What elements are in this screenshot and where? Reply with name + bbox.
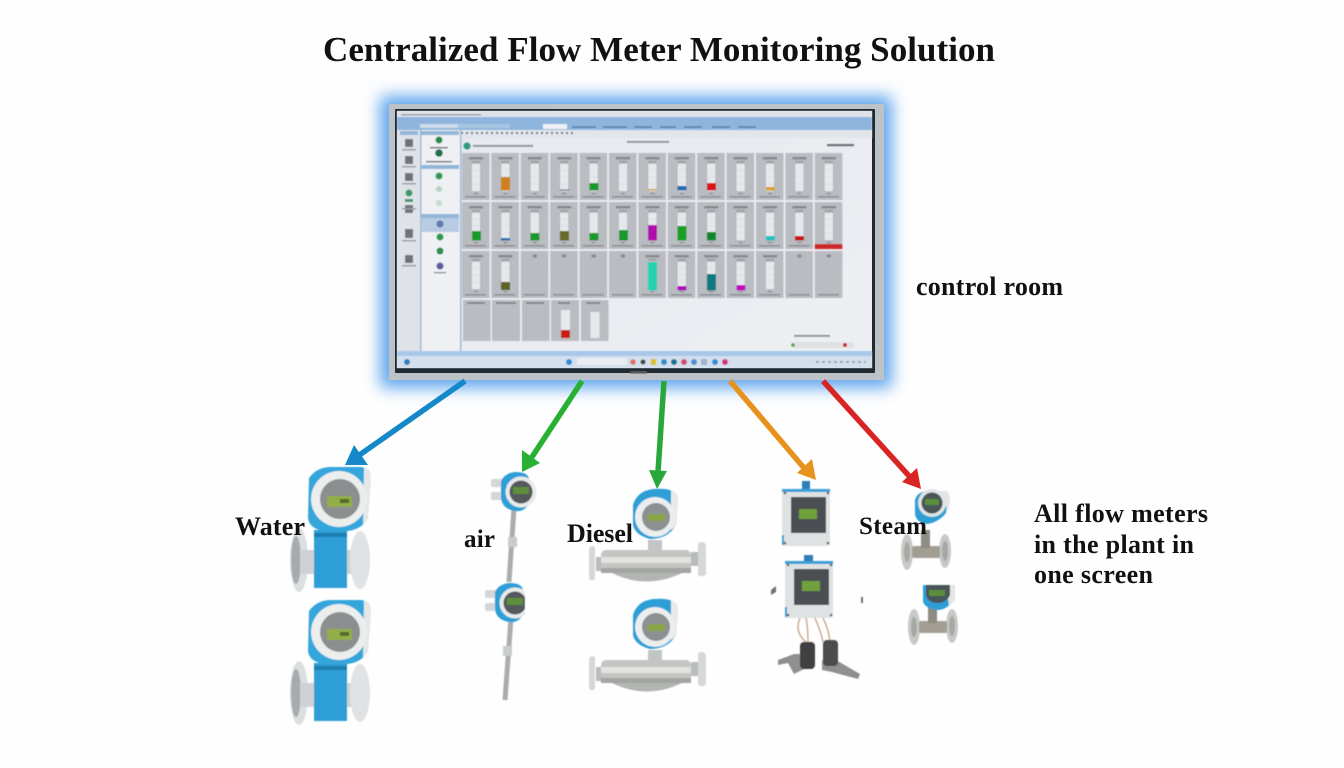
diesel meter top [589, 489, 706, 582]
water meter top [290, 467, 371, 592]
steam meter bottom head [923, 585, 955, 610]
steam meter top head [915, 489, 950, 524]
screen dashboard [397, 111, 872, 368]
flow meters: water [290, 467, 371, 725]
status legend [791, 335, 854, 348]
dashboard heading [464, 141, 854, 150]
transmitter wires [798, 618, 830, 642]
panel: control room monitor [380, 96, 892, 388]
water label: Water [235, 512, 305, 541]
note: all flow meters: All flow meters [1034, 499, 1208, 528]
steam meter bottom body [908, 605, 958, 645]
control room label: control room [916, 272, 1063, 301]
steam label: Steam [859, 513, 927, 540]
tank tiles row 3 [462, 251, 842, 298]
flow meters: diesel [589, 489, 706, 692]
note: all flow meters: in the plant in [1034, 530, 1195, 559]
flow meters: steam [901, 489, 958, 645]
arrow: green to diesel [649, 381, 667, 489]
tank tiles row 4 [463, 300, 608, 341]
transmitter bottom [785, 561, 833, 618]
arrow: orange to pump meter [730, 381, 816, 480]
title: Centralized Flow Meter Monitoring Solution [323, 30, 995, 69]
note: all flow meters: one screen [1034, 560, 1154, 589]
air meter bottom head [485, 583, 537, 623]
arrow: red to steam [823, 381, 921, 489]
steam meter top body [901, 530, 951, 570]
air rod collars [503, 537, 517, 656]
flow meters: air [485, 472, 537, 700]
flow meters: level transmitters [771, 481, 863, 679]
arrow: blue to water [345, 381, 465, 465]
tank tiles row 2 [462, 202, 842, 249]
transmitter brackets [802, 481, 813, 561]
air meter top head [491, 472, 536, 511]
transmitter top [782, 489, 830, 546]
diesel meter bottom [589, 599, 706, 692]
window title and tab bars [397, 111, 872, 138]
tank tiles row 1 [462, 153, 842, 200]
water meter bottom [290, 600, 371, 725]
diesel label: Diesel [567, 519, 633, 548]
arrow: green to air [522, 381, 582, 472]
air meter rods [505, 508, 514, 700]
taskbar [397, 351, 872, 368]
air label: air [464, 526, 495, 553]
sensors [778, 654, 860, 679]
left navigation sidebar [397, 130, 462, 351]
